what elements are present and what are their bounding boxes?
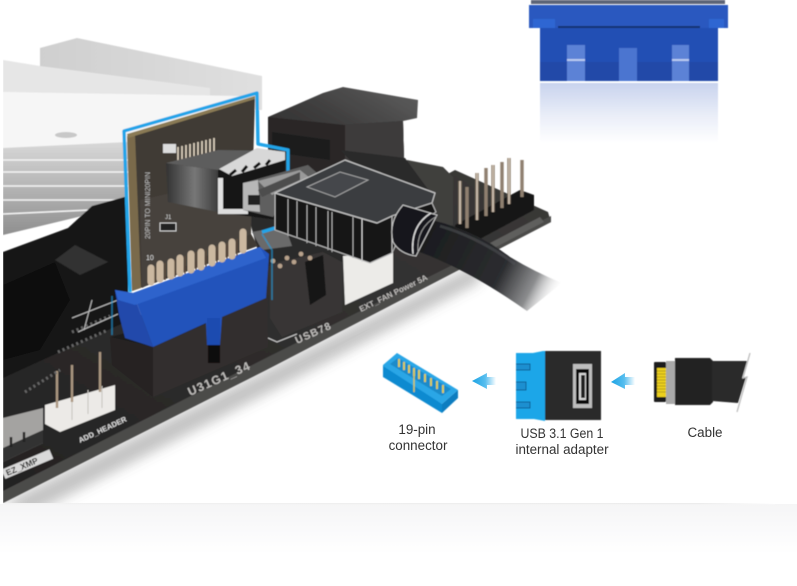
small solder pads — [163, 144, 176, 153]
connector upper band — [529, 5, 728, 28]
blue socket block — [115, 247, 269, 363]
caption: USB 3.1 Gen 1 internal adapter: USB 3.1 Gen 1 — [520, 426, 604, 441]
right dark block — [406, 159, 452, 226]
label ADD_HEADER: ADD_HEADER — [77, 414, 129, 445]
arrow: connector to adapter — [472, 373, 496, 389]
plug grip ribs — [288, 199, 353, 258]
caption: 19-pin connector — [389, 422, 448, 453]
caption: Cable: Cable — [688, 425, 722, 440]
top blue connector close-up — [529, 0, 728, 143]
diagram: 19-pin connector icon — [383, 353, 458, 413]
diagram: cable icon — [654, 353, 750, 412]
small left components — [25, 316, 110, 392]
white 4-pin header — [45, 352, 115, 432]
strain relief — [392, 205, 437, 256]
adapter usb slot — [573, 364, 592, 408]
plug metal tip — [243, 165, 325, 217]
backdrop behind plug — [250, 216, 340, 260]
black 19-pin header on board — [112, 334, 220, 362]
connector body — [540, 28, 718, 81]
board silkscreen right — [490, 217, 544, 247]
J1 jumper — [160, 223, 176, 231]
connector side lugs — [533, 19, 555, 28]
plug front — [275, 193, 392, 263]
caption: USB 3.1 Gen 1 internal adapter — [515, 426, 609, 457]
connector tabs — [567, 45, 585, 81]
plug top face — [275, 160, 435, 223]
black shroud — [3, 196, 128, 378]
adapter PCB: 10 — [146, 255, 154, 262]
usb78 header — [270, 252, 342, 337]
caption: USB 3.1 Gen 1 internal adapter: internal adapter — [515, 442, 609, 457]
label USB78: USB78 — [293, 320, 334, 347]
diagram: internal adapter icon — [516, 351, 601, 421]
pcb silkscreen text: 20PIN TO MINI20PIN — [145, 172, 152, 239]
left metal port — [3, 408, 43, 462]
white block — [343, 252, 393, 305]
shadow under board — [3, 262, 480, 515]
blue highlight around adapter — [112, 93, 288, 335]
motherboard photo — [1, 38, 562, 515]
adapter PCB: J1 — [165, 215, 172, 221]
label tag EZ XMP — [1, 449, 53, 479]
adapter PCB — [127, 96, 258, 291]
label U31G1_34: U31G1_34 — [186, 358, 253, 399]
caption: 19-pin connector: 19-pin — [398, 422, 436, 437]
pin header right — [455, 158, 534, 240]
floor reflection band — [0, 504, 797, 554]
metal receptacle on adapter — [166, 148, 285, 221]
heatsink — [3, 38, 262, 235]
label EXT FAN: EXT_FAN Power 5A — [358, 273, 429, 314]
label tag EZ XMP: EZ_XMP — [4, 455, 40, 478]
arrow: cable to adapter — [611, 373, 635, 389]
connector reflection — [540, 83, 718, 143]
connector pins — [531, 0, 725, 4]
circuit board — [3, 170, 551, 503]
top dark block — [268, 87, 418, 178]
caption: 19-pin connector: connector — [389, 438, 448, 453]
usb cable plug — [243, 160, 562, 311]
solder joints — [151, 232, 243, 282]
cable tube — [420, 221, 557, 312]
